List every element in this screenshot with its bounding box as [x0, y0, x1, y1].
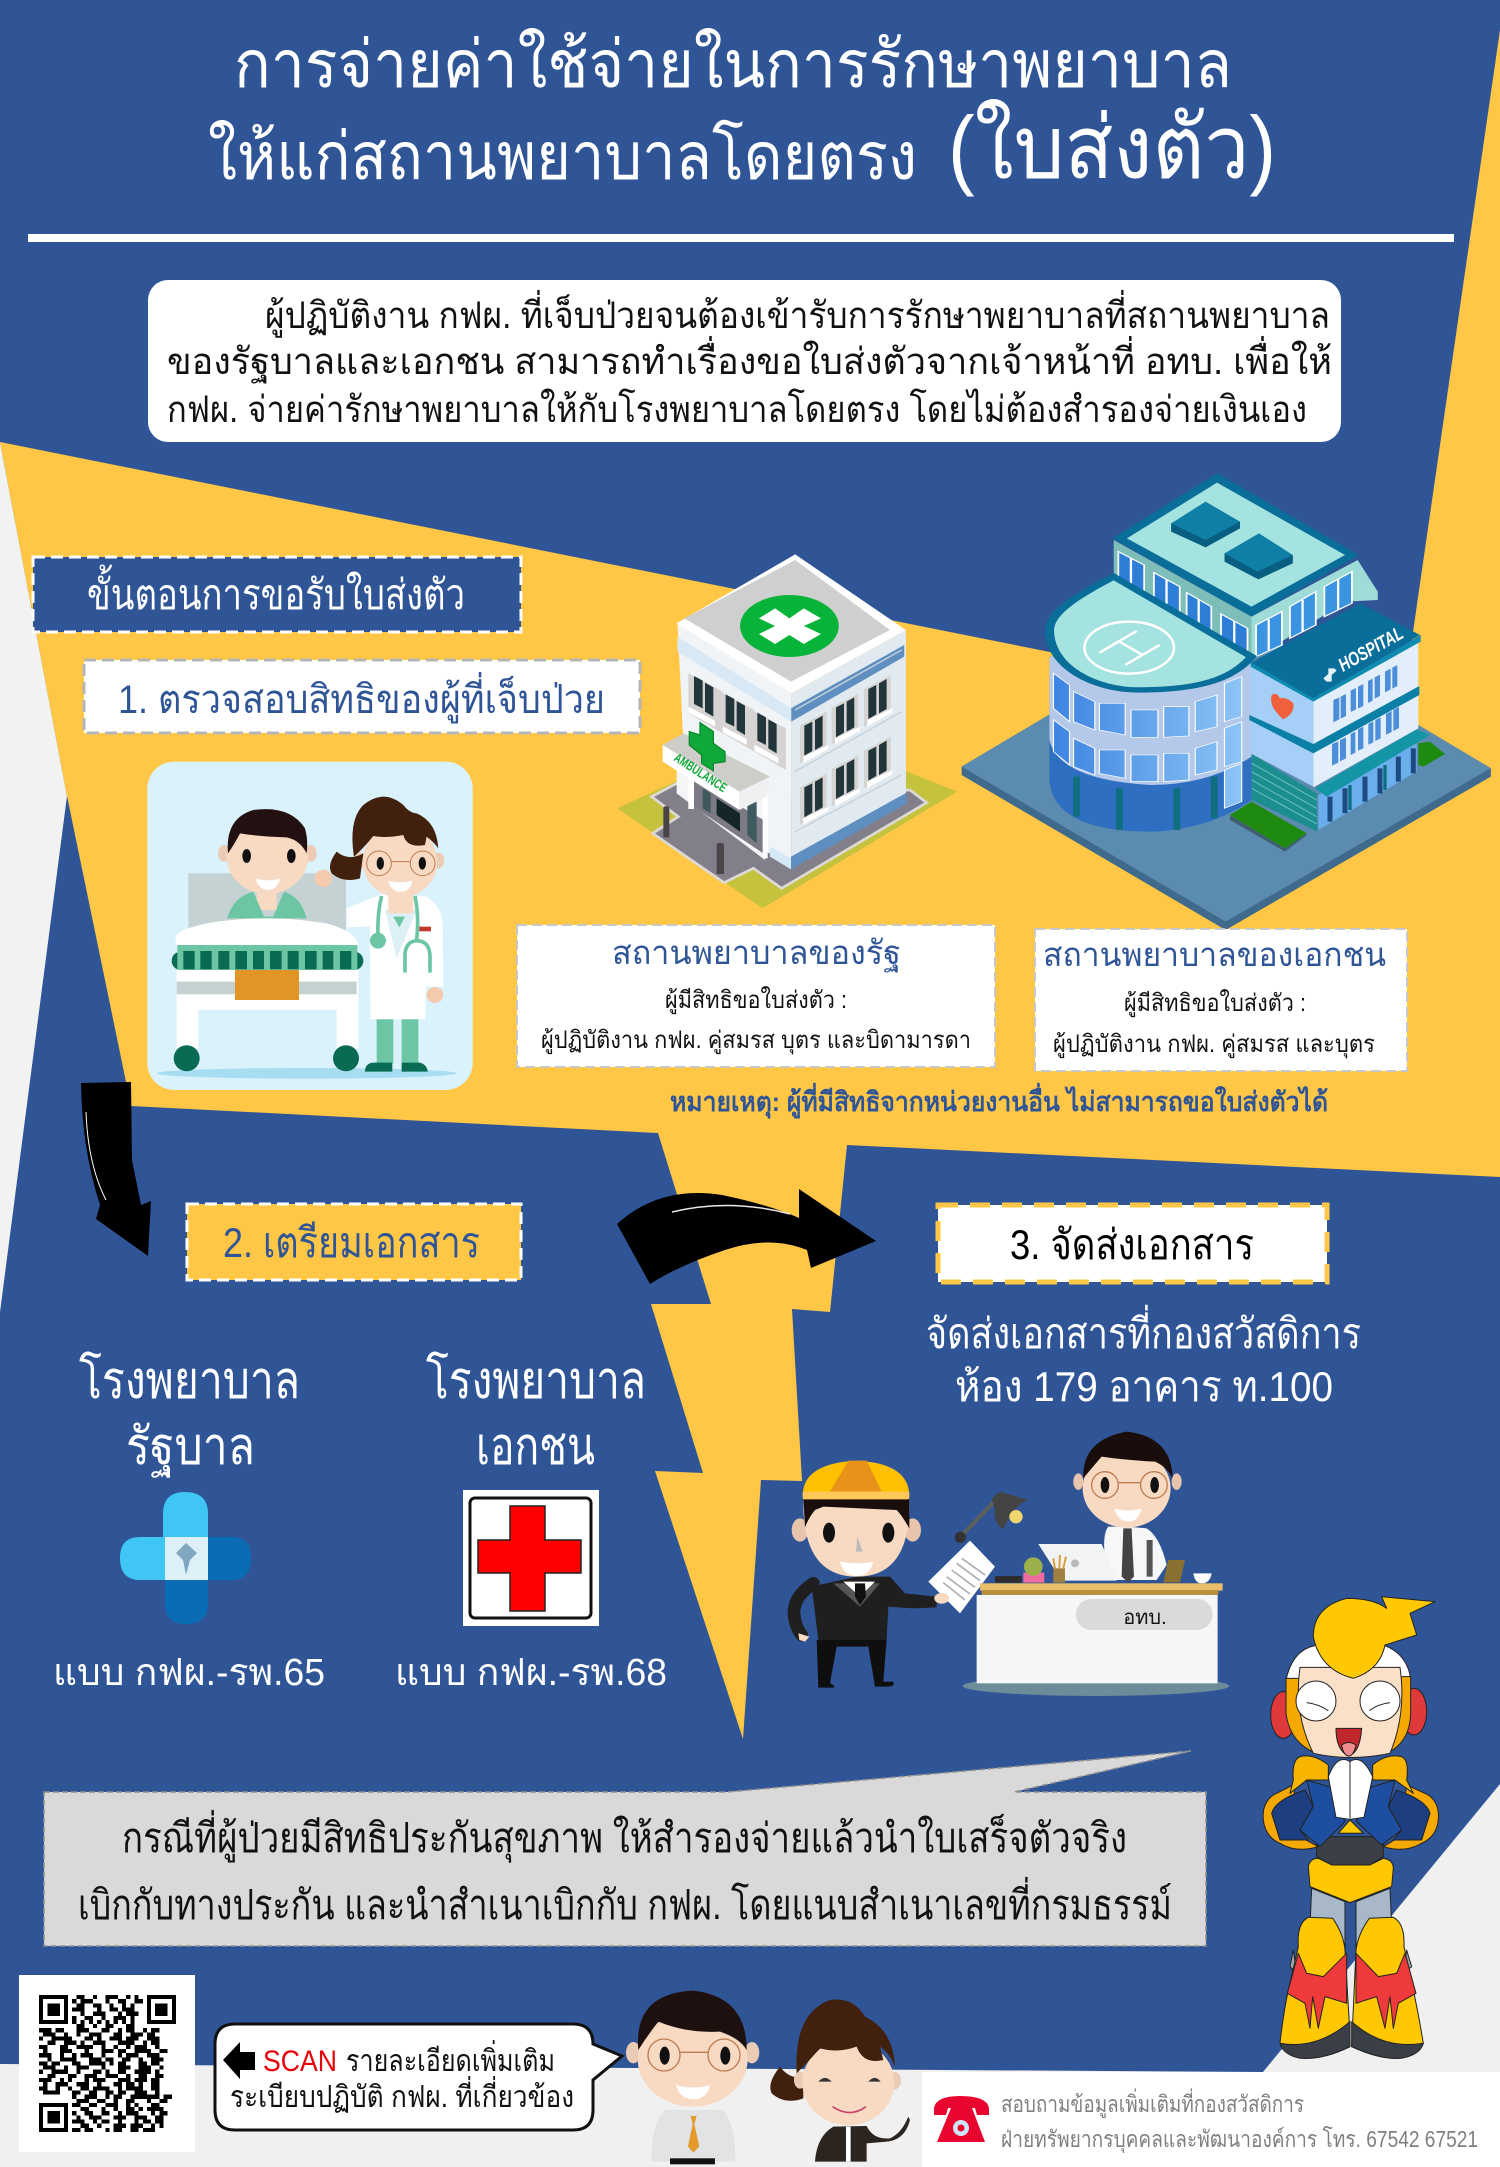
form number: แบบ กฟผ.-รพ.65 — [53, 1652, 325, 1694]
arrow: step 1 to step 2 — [81, 1082, 151, 1256]
icon: left arrow — [223, 2042, 255, 2079]
private hospital column — [395, 1351, 667, 1694]
private hospital name: เอกชน — [476, 1418, 595, 1476]
private eligibility label: ผู้มีสิทธิขอใบส่งตัว : — [1124, 989, 1306, 1018]
government hospital name: รัฐบาล — [126, 1418, 255, 1477]
callout text — [78, 1810, 1172, 1928]
ambulance sign: AMBULANCE — [671, 750, 730, 795]
eligibility label: ผู้มีสิทธิขอใบส่งตัว : — [665, 986, 847, 1015]
panel: government hospital — [517, 925, 995, 1067]
icon: blue plus — [120, 1492, 251, 1624]
step 2 label — [187, 1204, 521, 1280]
QR code — [39, 1995, 176, 2132]
hospital sign: HOSPITAL — [1335, 623, 1407, 676]
man — [626, 1991, 759, 2164]
woman — [770, 2000, 910, 2162]
government hospital name — [79, 1351, 300, 1477]
arrow: step 2 to step 3 — [617, 1189, 876, 1284]
panel: private hospital — [1035, 929, 1407, 1071]
callout text: เบิกกับทางประกัน และนำสำเนาเบิกกับ กฟผ. โดยแนบสำเนาเลขที่กรมธรรม์ — [78, 1877, 1172, 1928]
step 3 description — [926, 1305, 1361, 1410]
background: bottom grey band — [0, 1784, 1500, 2167]
scan detail: รายละเอียดเพิ่มเติม — [346, 2040, 555, 2078]
illustration: patient and doctor — [147, 762, 473, 1090]
QR panel — [19, 1975, 195, 2152]
step 3 label: 3. จัดส่งเอกสาร — [1010, 1221, 1254, 1268]
left wall windows — [688, 673, 786, 770]
title line 2: ให้แก่สถานพยาบาลโดยตรง — [208, 119, 917, 193]
illustration: mascot robot — [1263, 1597, 1439, 2058]
private hospital title: สถานพยาบาลของเอกชน — [1043, 936, 1386, 973]
footer contact — [922, 2072, 1500, 2167]
heading: steps: ขั้นตอนการขอรับใบส่งตัว — [87, 564, 465, 618]
callout: insurance note — [44, 1751, 1206, 1946]
government hospital column — [53, 1351, 325, 1694]
intro text: กฟผ. จ่ายค่ารักษาพยาบาลให้กับโรงพยาบาลโดยตรง โดยไม่ต้องสำรองจ่ายเงินเอง — [167, 388, 1307, 430]
illustration: employee handing document to welfare officer: อทบ. — [1123, 1607, 1167, 1629]
illustration: employee handing document to welfare officer — [792, 1432, 1229, 1696]
illustration: bottom characters — [626, 1991, 910, 2164]
step 3 description: ห้อง 179 อาคาร ท.100 — [955, 1363, 1333, 1410]
government hospital name: โรงพยาบาล — [79, 1351, 300, 1410]
eligibility list: ผู้ปฏิบัติงาน กฟผ. คู่สมรส บุตร และบิดามารดา — [541, 1027, 971, 1055]
private hospital name — [426, 1351, 646, 1476]
step 3 label — [938, 1205, 1327, 1282]
icon: red cross — [463, 1490, 599, 1626]
intro text: ผู้ปฏิบัติงาน กฟผ. ที่เจ็บป่วยจนต้องเข้ารับการรักษาพยาบาลที่สถานพยาบาล — [265, 289, 1330, 338]
illustration: private hospital — [962, 473, 1491, 930]
title emphasis: (ใบส่งตัว) — [948, 98, 1276, 197]
right wall windows — [800, 675, 892, 825]
step 1 label — [84, 660, 640, 733]
callout text: กรณีที่ผู้ป่วยมีสิทธิประกันสุขภาพ ให้สำรองจ่ายแล้วนำใบเสร็จตัวจริง — [122, 1810, 1127, 1863]
scan detail line 2: ระเบียบปฏิบัติ กฟผ. ที่เกี่ยวข้อง — [230, 2076, 574, 2114]
form number: แบบ กฟผ.-รพ.68 — [395, 1652, 667, 1694]
intro text: ของรัฐบาลและเอกชน สามารถทำเรื่องขอใบส่งตัวจากเจ้าหน้าที่ อทบ. เพื่อให้ — [167, 335, 1332, 384]
icon: telephone — [934, 2096, 989, 2142]
heading: steps — [33, 557, 521, 632]
panel: intro — [148, 280, 1341, 442]
government hospital title: สถานพยาบาลของรัฐ — [612, 934, 901, 973]
background: left grey wedge — [0, 442, 67, 1312]
contact text: สอบถามข้อมูลเพิ่มเติมที่กองสวัสดิการ — [1001, 2088, 1304, 2118]
step 1 label: 1. ตรวจสอบสิทธิของผู้ที่เจ็บป่วย — [118, 672, 605, 723]
intro text — [167, 289, 1332, 430]
contact text — [1001, 2088, 1478, 2153]
title line 1: การจ่ายค่าใช้จ่ายในการรักษาพยาบาล — [234, 27, 1232, 101]
step 3 description: จัดส่งเอกสารที่กองสวัสดิการ — [926, 1305, 1361, 1357]
title — [208, 27, 1276, 197]
background: yellow lightning shape — [0, 30, 1500, 1739]
illustration: government hospital — [617, 554, 957, 908]
step 2 label: 2. เตรียมเอกสาร — [223, 1219, 480, 1266]
speech bubble: scan — [215, 2024, 622, 2130]
scan word: SCAN — [263, 2045, 337, 2078]
private hospital name: โรงพยาบาล — [426, 1351, 646, 1410]
entrance — [663, 723, 770, 874]
note: หมายเหตุ: ผู้ที่มีสิทธิจากหน่วยงานอื่น ไม่สามารถขอใบส่งตัวได้ — [670, 1082, 1328, 1119]
private eligibility list: ผู้ปฏิบัติงาน กฟผ. คู่สมรส และบุตร — [1053, 1031, 1375, 1059]
